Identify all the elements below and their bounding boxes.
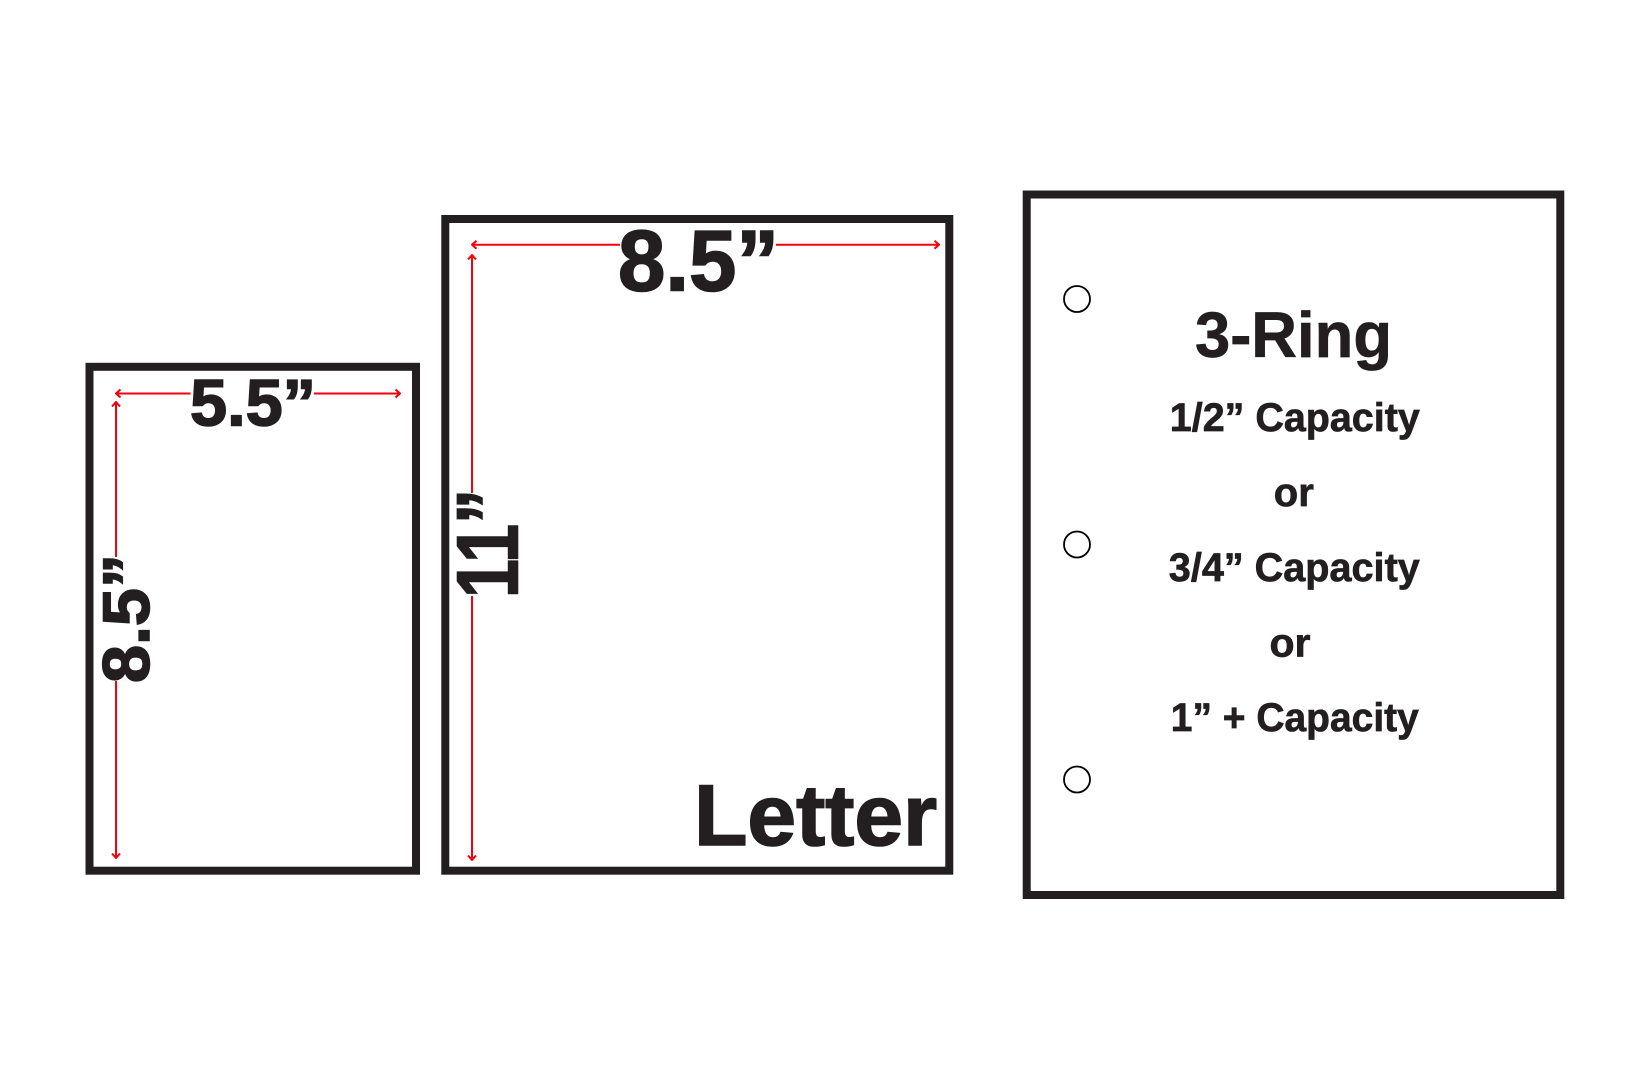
heading: 3-Ring: 3-Ring (1195, 299, 1392, 371)
text: or: or (1274, 471, 1314, 515)
arrow: height top (115, 402, 117, 557)
label: 5.5 inch width: 5.5” (190, 366, 316, 440)
text: or: or (1270, 622, 1310, 666)
text: three quarter inch capacity: 3/4” Capacity (1169, 546, 1421, 590)
arrow: height top (471, 255, 473, 493)
arrow: height bottom (471, 596, 473, 860)
label: 8.5 inch width: 8.5” (618, 214, 779, 310)
arrow: height bottom (115, 681, 117, 858)
icon: middle ring hole (1064, 532, 1090, 558)
arrow: width right (314, 392, 400, 394)
arrow: width left (116, 392, 190, 394)
icon: bottom ring hole (1064, 766, 1090, 792)
panel: letter sheet (440, 214, 949, 871)
panel: 3-ring sheet (1027, 194, 1560, 895)
label: 8.5 inch height: 8.5” (89, 554, 163, 683)
text: half inch capacity: 1/2” Capacity (1170, 396, 1421, 440)
label: Letter: Letter (694, 768, 937, 864)
label: 11 inch height: 11” (440, 489, 537, 598)
arrow: width right (776, 244, 939, 246)
text: one inch plus capacity: 1” + Capacity (1171, 696, 1420, 740)
panel: half-letter sheet (89, 366, 416, 871)
arrow: width left (472, 244, 620, 246)
icon: top ring hole (1064, 286, 1090, 312)
